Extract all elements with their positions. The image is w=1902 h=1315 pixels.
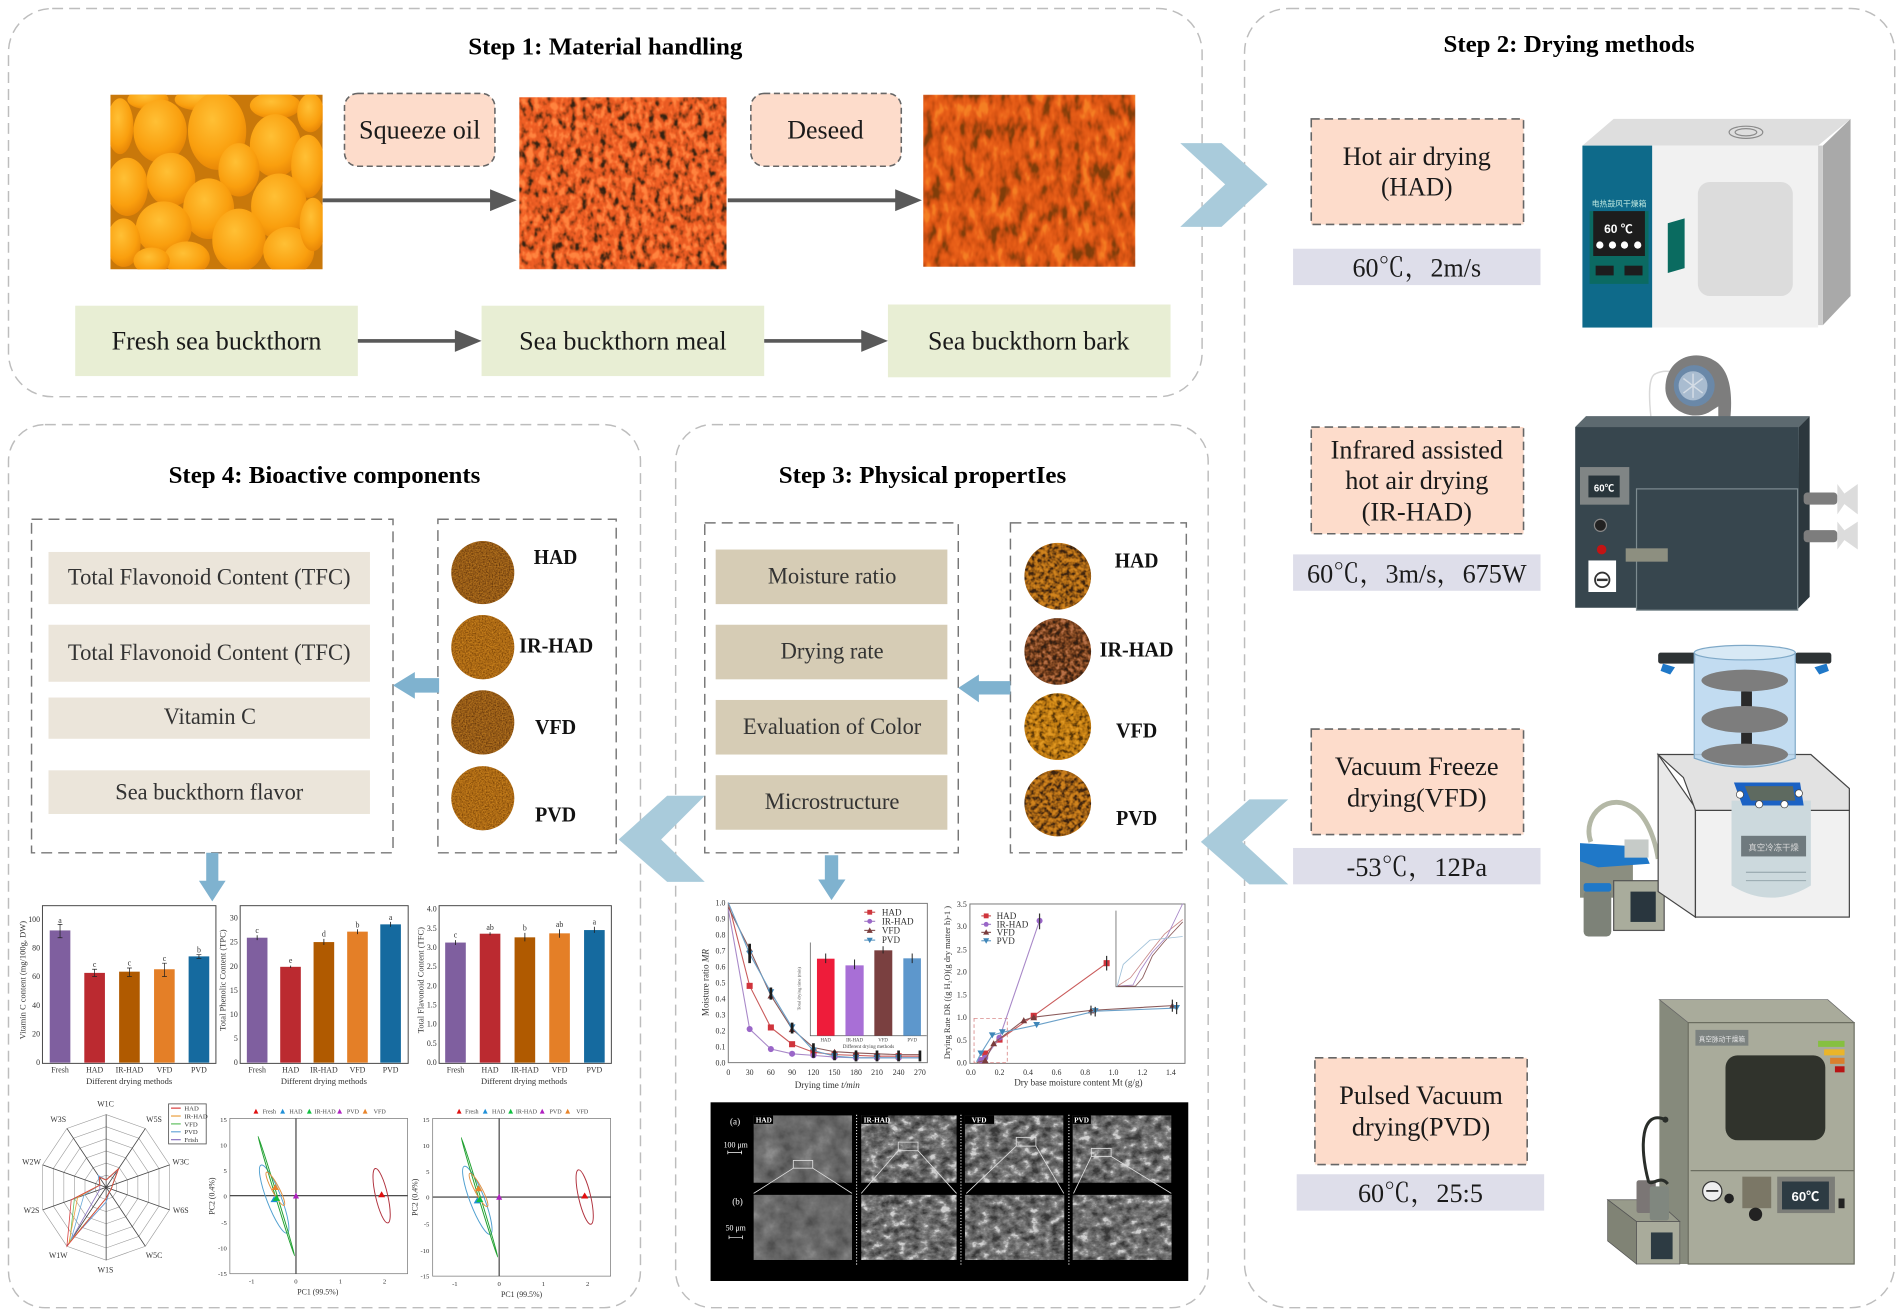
chart: total phenolic content: 5 xyxy=(234,1034,238,1043)
micrographs: SEM microstructure: 100 μm xyxy=(724,1141,748,1150)
property: moisture ratio: Moisture ratio xyxy=(768,563,896,589)
property list xyxy=(705,523,958,853)
chart: PCA plot left: 0 xyxy=(294,1278,298,1285)
method box: IR-HAD: (IR-HAD) xyxy=(1362,496,1472,526)
micrographs: SEM microstructure: 50 μm xyxy=(726,1224,746,1233)
arrow: step 2 to step 3 xyxy=(1201,799,1288,884)
icon: pulsed vacuum dryer: 60℃ xyxy=(1792,1189,1819,1204)
chart: moisture ratio curves: 0.8 xyxy=(716,931,725,940)
label: fresh sea buckthorn xyxy=(75,306,358,376)
chart: total flavonoid content: 1.5 xyxy=(427,1001,437,1010)
chart: radar of e-nose sensors: W2W xyxy=(22,1158,42,1167)
parameters: VFD xyxy=(1293,848,1541,884)
chart: total flavonoid content: 3.0 xyxy=(427,943,437,952)
chart: vitamin C content: Different drying methods xyxy=(86,1076,172,1086)
callout: deseed: Deseed xyxy=(787,114,864,144)
chart: drying rate curves: 0.4 xyxy=(1023,1068,1033,1077)
chart: PCA plot left: HAD xyxy=(289,1110,303,1116)
icon: hot air oven: 电热鼓风干燥箱 xyxy=(1592,198,1647,209)
chart: total flavonoid content: Total Flavonoid Content (TFC) xyxy=(415,927,425,1033)
chart: PCA plot right: 10 xyxy=(423,1143,430,1150)
chart: total phenolic content: Total Phenolic Content (TPC) xyxy=(218,929,228,1031)
chart: PCA plot right: HAD xyxy=(492,1110,506,1116)
chart: PCA plot right: 0 xyxy=(426,1195,430,1202)
chart: total phenolic content: 0 xyxy=(234,1058,238,1067)
chart: PCA plot left: 15 xyxy=(220,1117,228,1124)
chart: drying rate curves: 1.5 xyxy=(957,991,967,1000)
chart: moisture ratio curves: 180 xyxy=(850,1068,862,1077)
sample: PVD flakes: PVD xyxy=(1116,808,1157,830)
chart: moisture ratio curves: 0.3 xyxy=(716,1011,725,1020)
icon: vacuum freeze dryer: 真空冷冻干燥 xyxy=(1748,841,1799,853)
chart: total flavonoid content: ab xyxy=(486,923,494,932)
chart: moisture ratio curves: 0.2 xyxy=(716,1027,725,1036)
panel: step 3 physical properties xyxy=(676,425,1208,1308)
panel: step 2 drying methods xyxy=(1245,9,1895,1308)
chart: moisture ratio curves: Moisture ratio MR xyxy=(700,949,710,1016)
micrographs: SEM microstructure: VFD xyxy=(972,1117,987,1125)
chart: total phenolic content: IR-HAD xyxy=(310,1065,338,1074)
micrographs: SEM microstructure xyxy=(711,1102,1188,1281)
chart: radar of e-nose sensors: W2S xyxy=(24,1206,39,1215)
chart: PCA plot left: 1 xyxy=(339,1278,342,1285)
chart: drying rate curves: 0.5 xyxy=(957,1036,967,1045)
chart: total flavonoid content: 4.0 xyxy=(427,905,437,914)
callout: deseed xyxy=(751,93,901,166)
arrow: properties to charts xyxy=(818,855,845,900)
sample: IR-HAD flakes: IR-HAD xyxy=(1100,639,1174,661)
icon: infrared hot air dryer xyxy=(1575,355,1858,610)
chart: total flavonoid content: c xyxy=(454,931,458,940)
arrow: fresh to meal label xyxy=(358,330,482,352)
chart: PCA plot left: Fresh xyxy=(263,1110,276,1116)
micrographs: SEM microstructure: (b) xyxy=(732,1197,743,1207)
chart: moisture ratio curves: Drying time t/min xyxy=(795,1080,860,1090)
chart: PCA plot right: PVD xyxy=(550,1110,562,1116)
legend: radar: HAD xyxy=(184,1106,199,1113)
micrographs: SEM microstructure: PVD xyxy=(1074,1117,1089,1125)
label: sea buckthorn meal xyxy=(482,306,764,376)
label: sea buckthorn bark: Sea buckthorn bark xyxy=(928,325,1130,355)
panel: step 4 bioactive components xyxy=(8,425,640,1308)
chart: PCA plot right: 2 xyxy=(586,1281,589,1288)
chart: PCA plot right: PC1 (99.5%) xyxy=(501,1290,543,1299)
legend: radar: PVD xyxy=(184,1129,198,1136)
photo: fresh sea buckthorn berries xyxy=(107,89,326,275)
chart: PCA plot left xyxy=(208,1109,408,1296)
inset: total drying time bars: HAD xyxy=(820,1038,831,1043)
chart: PCA plot left: 5 xyxy=(224,1168,228,1175)
chart: moisture ratio curves: 0.6 xyxy=(716,962,725,971)
chart: PCA plot right: PC2 (0.4%) xyxy=(410,1178,419,1216)
chart: PCA plot right: -1 xyxy=(452,1281,458,1288)
icon: vacuum freeze dryer xyxy=(1580,645,1849,936)
inset: total drying time bars: VFD xyxy=(878,1038,888,1043)
chart: vitamin C content: c xyxy=(163,954,167,963)
chart: drying rate curves: 0.0 xyxy=(966,1068,976,1077)
chart: total phenolic content: HAD xyxy=(282,1065,299,1074)
parameters: HAD: 60℃，2m/s xyxy=(1353,253,1481,283)
legend: radar: Frish xyxy=(184,1137,199,1144)
panel: step 1 material handling xyxy=(8,9,1202,397)
sample: HAD flakes: HAD xyxy=(1115,551,1158,573)
chart: PCA plot left: IR-HAD xyxy=(315,1110,336,1116)
chart: drying rate curves: Drying Rate DR ((g H₂O)(g dry matter h)-1 ) xyxy=(942,906,952,1059)
legend: moisture ratio xyxy=(864,907,914,945)
arrow: samples to properties xyxy=(958,674,1010,702)
chart: radar of e-nose sensors: W1C xyxy=(97,1099,114,1108)
sample: HAD flakes xyxy=(1024,543,1158,610)
chart: vitamin C content: 80 xyxy=(32,944,40,953)
method box: IR-HAD xyxy=(1311,427,1524,534)
arrow: berries to meal xyxy=(323,189,517,211)
icon: pulsed vacuum dryer: 真空脉动干燥箱 xyxy=(1699,1033,1745,1043)
chart: vitamin C content: c xyxy=(93,960,97,969)
chart: total phenolic content: Fresh xyxy=(248,1065,266,1074)
sample: IR-HAD powder: IR-HAD xyxy=(519,636,593,658)
chart: total flavonoid content: 2.5 xyxy=(427,962,437,971)
chart: moisture ratio curves: 0.7 xyxy=(716,946,725,955)
dried samples xyxy=(1010,523,1186,853)
chart: PCA plot right xyxy=(410,1109,611,1299)
parameters: HAD xyxy=(1293,249,1541,285)
callout: squeeze oil xyxy=(344,93,495,166)
chart: moisture ratio curves: 30 xyxy=(746,1068,754,1077)
inset: drying rate zoom xyxy=(1116,904,1183,987)
chart: PCA plot right: -15 xyxy=(421,1274,430,1281)
property: microstructure: Microstructure xyxy=(765,788,899,814)
sample: HAD powder: HAD xyxy=(534,547,577,569)
legend: drying rate: HAD xyxy=(997,911,1017,921)
chart: moisture ratio curves: 120 xyxy=(808,1068,819,1077)
property: drying rate xyxy=(716,625,947,679)
inset: total drying time bars: PVD xyxy=(907,1038,918,1043)
sample: VFD powder: VFD xyxy=(535,717,576,739)
component: total flavonoid content repeat xyxy=(49,625,370,682)
chart: radar of e-nose sensors: W1S xyxy=(98,1265,113,1274)
label: fresh sea buckthorn: Fresh sea buckthorn xyxy=(112,325,321,355)
chart: total phenolic content: e xyxy=(289,956,293,965)
legend: radar: IR-HAD xyxy=(184,1113,208,1120)
chart: drying rate curves: Dry base moisture content Mt (g/g) xyxy=(1014,1078,1143,1088)
chart: drying rate curves: 0.6 xyxy=(1052,1068,1062,1077)
chart: drying rate curves: 2.0 xyxy=(957,968,967,977)
component: sea buckthorn flavor: Sea buckthorn flavor xyxy=(115,778,304,804)
chart: moisture ratio curves: 90 xyxy=(788,1068,796,1077)
sample: PVD flakes xyxy=(1024,770,1157,836)
icon: pulsed vacuum dryer xyxy=(1608,1000,1854,1264)
chart: total phenolic content xyxy=(218,906,408,1086)
component: total flavonoid content repeat: Total Flavonoid Content (TFC) xyxy=(68,639,351,665)
chart: total flavonoid content: 0.5 xyxy=(427,1039,437,1048)
method box: IR-HAD: hot air drying xyxy=(1345,465,1488,495)
property: drying rate: Drying rate xyxy=(781,638,884,664)
heading: step 4: Step 4: Bioactive components xyxy=(169,462,480,489)
sample: IR-HAD flakes xyxy=(1024,618,1174,685)
chart: PCA plot left: -1 xyxy=(249,1278,254,1285)
property: evaluation of color: Evaluation of Color xyxy=(743,713,922,739)
chart: moisture ratio curves xyxy=(700,899,927,1090)
chart: total flavonoid content: b xyxy=(523,923,527,932)
chart: total phenolic content: b xyxy=(356,920,360,929)
legend: drying rate xyxy=(981,911,1029,946)
method box: PVD: Pulsed Vacuum xyxy=(1339,1080,1503,1110)
icon: hot air oven xyxy=(1582,119,1851,328)
photo: sea buckthorn bark xyxy=(923,95,1135,267)
legend: moisture ratio: PVD xyxy=(882,935,900,945)
inset: total drying time bars: Total drying time (min) xyxy=(797,967,802,1010)
chart: PCA plot right: 0 xyxy=(497,1281,501,1288)
component list xyxy=(32,519,393,853)
legend: radar xyxy=(169,1104,208,1144)
chart: radar of e-nose sensors: W1W xyxy=(49,1251,68,1260)
chart: vitamin C content: HAD xyxy=(86,1065,103,1074)
chart: PCA plot left: PVD xyxy=(347,1110,360,1116)
chart: vitamin C content: PVD xyxy=(191,1065,207,1074)
chart: PCA plot left: -5 xyxy=(221,1220,228,1227)
chart: total flavonoid content: 1.0 xyxy=(427,1020,437,1029)
chart: total phenolic content: c xyxy=(255,926,259,935)
arrow: meal to bark label xyxy=(764,330,888,352)
chart: PCA plot right: 1 xyxy=(542,1281,545,1288)
chart: total flavonoid content: 0.0 xyxy=(427,1058,437,1067)
chart: total phenolic content: PVD xyxy=(383,1065,399,1074)
component: sea buckthorn flavor xyxy=(49,770,370,814)
chart: total flavonoid content: PVD xyxy=(586,1065,603,1074)
chart: total phenolic content: 25 xyxy=(230,938,238,947)
chart: PCA plot right: Fresh xyxy=(465,1110,479,1116)
chart: vitamin C content: VFD xyxy=(157,1065,173,1074)
chart: PCA plot left: PC1 (99.5%) xyxy=(297,1287,339,1296)
micrographs: SEM microstructure: IR-HAD xyxy=(864,1117,890,1125)
chart: moisture ratio curves: 0.1 xyxy=(716,1043,725,1052)
inset: total drying time bars: Different drying methods xyxy=(843,1043,894,1050)
chart: PCA plot right: VFD xyxy=(576,1110,589,1116)
chart: PCA plot left: PC2 (0.4%) xyxy=(208,1177,217,1215)
chart: drying rate curves: 1.4 xyxy=(1166,1068,1176,1077)
chart: vitamin C content: c xyxy=(128,959,132,968)
chart: moisture ratio curves: 210 xyxy=(871,1068,883,1077)
chart: drying rate curves: 0.2 xyxy=(995,1068,1005,1077)
component: total flavonoid content xyxy=(49,552,370,604)
legend: drying rate: IR-HAD xyxy=(997,919,1029,929)
parameters: PVD: 60℃，25:5 xyxy=(1358,1178,1483,1208)
chart: vitamin C content xyxy=(17,906,216,1086)
chart: total flavonoid content: VFD xyxy=(552,1065,568,1074)
chart: moisture ratio curves: 0.9 xyxy=(716,915,725,924)
method box: HAD: (HAD) xyxy=(1381,171,1453,201)
component: vitamin C: Vitamin C xyxy=(164,703,256,729)
photo: sea buckthorn meal xyxy=(519,97,727,269)
chart: PCA plot left: -15 xyxy=(218,1271,228,1278)
micrographs: SEM microstructure: HAD xyxy=(756,1117,772,1125)
chart: vitamin C content: Vitamin C content (mg/100g, DW) xyxy=(17,921,27,1039)
arrow: powder to components xyxy=(393,672,439,699)
parameters: VFD: -53℃，12Pa xyxy=(1346,852,1487,882)
chart: moisture ratio curves: 270 xyxy=(914,1068,926,1077)
chart: moisture ratio curves: 1.0 xyxy=(716,899,725,908)
chart: moisture ratio curves: 240 xyxy=(893,1068,905,1077)
micrographs: SEM microstructure: (a) xyxy=(730,1117,740,1127)
chart: drying rate curves xyxy=(942,900,1185,1088)
chart: PCA plot left: VFD xyxy=(374,1110,386,1116)
heading: step 2: Step 2: Drying methods xyxy=(1443,31,1695,58)
chart: moisture ratio curves: 0.4 xyxy=(716,995,725,1004)
chart: total flavonoid content: Fresh xyxy=(447,1065,464,1074)
chart: vitamin C content: 60 xyxy=(32,972,40,981)
chart: PCA plot left: 0 xyxy=(224,1194,228,1201)
chart: total flavonoid content: 3.5 xyxy=(427,924,437,933)
chart: total flavonoid content: 2.0 xyxy=(427,981,437,990)
sample: PVD powder xyxy=(451,766,576,830)
chart: total phenolic content: 30 xyxy=(230,914,238,923)
heading: step 3: Step 3: Physical propertIes xyxy=(779,462,1066,489)
chart: drying rate curves: 2.5 xyxy=(957,945,967,954)
chart: drying rate curves: 0.0 xyxy=(957,1059,967,1068)
chart: drying rate curves: 1.0 xyxy=(1109,1068,1119,1077)
chart: vitamin C content: Fresh xyxy=(51,1065,69,1074)
chart: radar of e-nose sensors xyxy=(22,1099,208,1274)
method box: HAD xyxy=(1311,119,1524,224)
sample: VFD flakes: VFD xyxy=(1116,721,1157,743)
method box: IR-HAD: Infrared assisted xyxy=(1331,435,1504,465)
chart: PCA plot left: -10 xyxy=(218,1246,228,1253)
chart: vitamin C content: IR-HAD xyxy=(116,1065,144,1074)
label: sea buckthorn bark xyxy=(888,305,1171,377)
callout: squeeze oil: Squeeze oil xyxy=(359,114,480,144)
sample: VFD flakes xyxy=(1024,693,1157,760)
chart: total flavonoid content xyxy=(415,905,611,1086)
parameters: IR-HAD: 60℃，3m/s，675W xyxy=(1307,558,1527,588)
chart: moisture ratio curves: 0.0 xyxy=(716,1059,725,1068)
chart: radar of e-nose sensors: W3C xyxy=(172,1158,189,1167)
method box: PVD: drying(PVD) xyxy=(1352,1111,1490,1141)
legend: moisture ratio: IR-HAD xyxy=(882,916,914,926)
legend: moisture ratio: HAD xyxy=(882,907,902,917)
chart: PCA plot right: -5 xyxy=(424,1221,430,1228)
powder samples xyxy=(438,519,616,853)
chart: total flavonoid content: a xyxy=(593,917,597,926)
chart: vitamin C content: 20 xyxy=(32,1029,40,1038)
icon: infrared hot air dryer: 60℃ xyxy=(1594,483,1615,494)
legend: drying rate: PVD xyxy=(997,936,1015,946)
chart: total phenolic content: 15 xyxy=(230,986,238,995)
chart: radar of e-nose sensors: W5C xyxy=(146,1251,162,1260)
chart: PCA plot right: IR-HAD xyxy=(516,1110,538,1116)
chart: vitamin C content: a xyxy=(58,916,62,925)
heading: step 1: Step 1: Material handling xyxy=(468,34,742,61)
chart: total phenolic content: 20 xyxy=(230,962,238,971)
chart: total flavonoid content: Different drying methods xyxy=(481,1076,567,1086)
chart: vitamin C content: 0 xyxy=(36,1058,40,1067)
parameters: PVD xyxy=(1297,1174,1544,1211)
sample: HAD powder xyxy=(451,541,577,604)
chart: PCA plot right: 5 xyxy=(426,1169,430,1176)
chart: total phenolic content: d xyxy=(322,929,326,938)
legend: radar: VFD xyxy=(184,1121,198,1128)
chart: drying rate curves: 1.0 xyxy=(957,1013,967,1022)
chart: PCA plot right: 15 xyxy=(423,1117,430,1124)
inset: total drying time bars: IR-HAD xyxy=(846,1038,864,1043)
chart: moisture ratio curves: 60 xyxy=(767,1068,775,1077)
chart: total phenolic content: a xyxy=(389,913,393,922)
arrow: step 3 to step 4 xyxy=(619,796,705,882)
chart: PCA plot left: 2 xyxy=(383,1278,386,1285)
chart: radar of e-nose sensors: W3S xyxy=(50,1115,66,1124)
chart: vitamin C content: 40 xyxy=(32,1001,40,1010)
chart: moisture ratio curves: 150 xyxy=(829,1068,841,1077)
arrow: meal to bark xyxy=(728,189,922,211)
method box: HAD: Hot air drying xyxy=(1343,141,1491,171)
property: evaluation of color xyxy=(716,700,947,755)
chart: moisture ratio curves: 0 xyxy=(726,1068,730,1077)
component: vitamin C xyxy=(49,698,370,739)
chart: moisture ratio curves: 0.5 xyxy=(716,978,725,987)
chart: PCA plot right: -10 xyxy=(421,1248,430,1255)
chart: drying rate curves: 1.2 xyxy=(1137,1068,1147,1077)
arrow: components to charts xyxy=(199,853,226,901)
legend: moisture ratio: VFD xyxy=(882,925,900,935)
component: total flavonoid content: Total Flavonoid Content (TFC) xyxy=(68,564,351,590)
chart: PCA plot left: 10 xyxy=(220,1143,228,1150)
chart: total flavonoid content: HAD xyxy=(482,1065,499,1074)
sample: IR-HAD powder xyxy=(451,615,593,679)
method box: VFD: drying(VFD) xyxy=(1347,783,1487,813)
chart: radar of e-nose sensors: W5S xyxy=(146,1115,162,1124)
icon: hot air oven: 60 ℃ xyxy=(1604,222,1633,236)
chart: vitamin C content: b xyxy=(197,945,201,954)
chart: vitamin C content: 100 xyxy=(28,915,40,924)
chart: total phenolic content: 10 xyxy=(230,1010,238,1019)
chart: drying rate curves: 3.5 xyxy=(957,900,967,909)
method box: VFD: Vacuum Freeze xyxy=(1335,751,1499,781)
chart: total phenolic content: Different drying methods xyxy=(281,1076,367,1086)
arrow: step 1 to step 2 xyxy=(1180,143,1268,227)
sample: VFD powder xyxy=(451,690,576,755)
chart: drying rate curves: 0.8 xyxy=(1080,1068,1090,1077)
chart: radar of e-nose sensors: W6S xyxy=(173,1206,189,1215)
method box: VFD xyxy=(1311,729,1524,835)
chart: total phenolic content: VFD xyxy=(350,1065,366,1074)
sample: PVD powder: PVD xyxy=(535,804,576,826)
chart: total flavonoid content: ab xyxy=(556,920,563,929)
chart: drying rate curves: 3.0 xyxy=(957,922,967,931)
inset: total drying time bars xyxy=(797,943,927,1050)
property: moisture ratio xyxy=(716,550,947,604)
label: sea buckthorn meal: Sea buckthorn meal xyxy=(519,325,727,355)
property: microstructure xyxy=(716,775,947,830)
chart: total flavonoid content: IR-HAD xyxy=(511,1065,539,1074)
legend: drying rate: VFD xyxy=(997,927,1015,937)
method box: PVD xyxy=(1315,1058,1527,1165)
